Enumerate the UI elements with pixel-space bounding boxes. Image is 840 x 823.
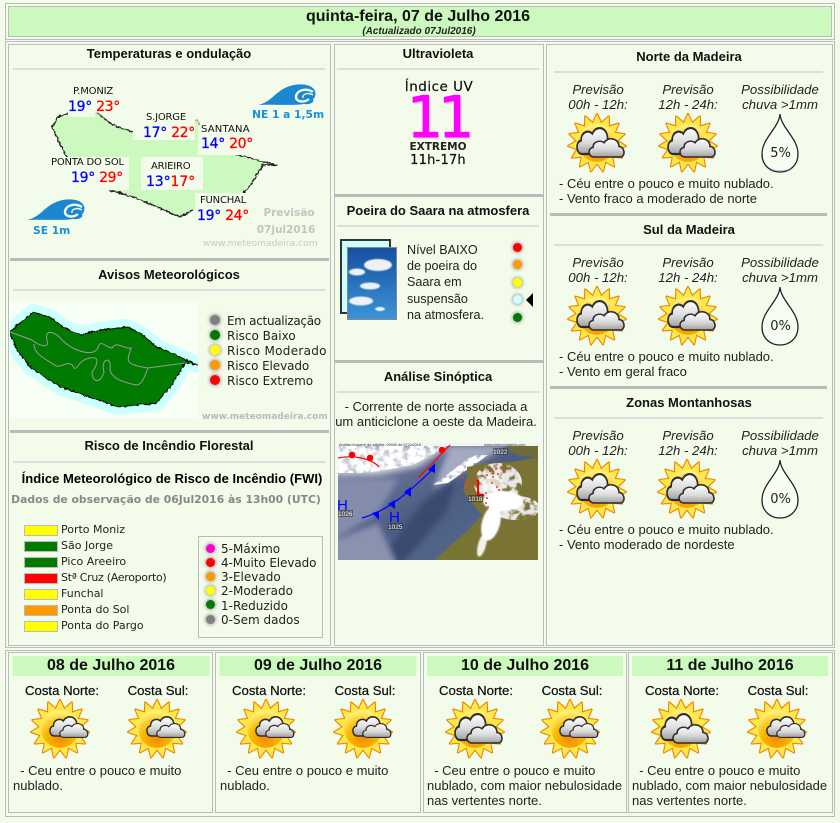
icon: sun cloud 12h <box>657 458 717 518</box>
col1 label <box>568 255 628 285</box>
dot extremo <box>210 375 220 385</box>
UV value: 11 <box>407 85 469 151</box>
col1 label <box>568 428 628 458</box>
heading: poeira: Poeira do Saara na atmosfera <box>347 203 529 218</box>
temp: Santana: 14° 20° <box>201 136 253 152</box>
icon: sun cloud 00h <box>567 458 627 518</box>
icon norte <box>652 700 712 760</box>
panel: right column <box>546 44 833 646</box>
temp: Funchal: 19° 24° <box>197 208 249 224</box>
icon sul <box>334 700 394 760</box>
forecast text <box>559 349 774 379</box>
col1 label <box>568 82 628 112</box>
arrow marker <box>526 293 533 307</box>
label: Arieiro: ARIEIRO <box>151 161 190 172</box>
label: Ponta do Sol: PONTA DO SOL <box>51 157 124 168</box>
label norte: Costa Norte: <box>439 683 513 698</box>
card: 08 Julho <box>8 652 213 813</box>
chart: satellite synoptic map <box>338 443 538 560</box>
panel: Zonas Montanhosas <box>554 395 823 552</box>
label norte: Costa Norte: <box>645 683 719 698</box>
text 0: 0-Sem dados <box>221 613 300 627</box>
forecast text: - Céu entre o pouco e muito nublado. <box>559 349 774 364</box>
map: Madeira temperatures <box>50 112 278 218</box>
text 3: 3-Elevado <box>221 570 281 584</box>
icon: drop 0% <box>761 460 799 519</box>
label sul: Costa Sul: <box>128 683 188 698</box>
name Sao Jorge: São Jorge <box>61 539 113 552</box>
name Porto Moniz: Porto Moniz <box>61 523 125 536</box>
dot 4 <box>206 558 215 567</box>
date band: 09 de Julho 2016 <box>254 657 382 674</box>
observation date: Dados de observação de 06Jul2016 às 13h00 (UTC) <box>11 493 321 506</box>
update note: (Actualizado 07Jul2016) <box>362 26 476 37</box>
temp: P.Moniz: 19° 23° <box>68 99 120 115</box>
text elevado: Risco Elevado <box>227 359 309 373</box>
text 2: 2-Moderado <box>221 584 293 598</box>
heading Norte: Norte da Madeira <box>636 49 742 64</box>
text: - Ceu entre o pouco e muito nublado, com maior nebulosidade nas vertentes norte. <box>632 763 827 808</box>
icon: drop 0% <box>761 287 799 346</box>
col3 label: chuva >1mm <box>742 97 818 112</box>
name Funchal: Funchal <box>61 587 104 600</box>
label sul: Costa Sul: <box>748 683 808 698</box>
swatch Sao Jorge <box>24 541 58 552</box>
header banner <box>5 3 835 40</box>
name Sta Cruz: Stª Cruz (Aeroporto) <box>61 571 166 584</box>
label: S.Jorge: S.JORGE <box>146 112 186 123</box>
forecast text: - Céu entre o pouco e muito nublado. <box>559 176 774 191</box>
icon: sun cloud 00h <box>567 286 627 346</box>
chart: satellite synoptic map: Análise imagem de satélite: 00h00 de 07Jul2016 <box>339 443 421 447</box>
analysis text <box>335 399 537 429</box>
UV level: EXTREMO <box>409 141 467 153</box>
col3 label <box>741 428 819 458</box>
label sul: Costa Sul: <box>542 683 602 698</box>
col1 label: 00h - 12h: <box>568 443 628 458</box>
swatch Sta Cruz <box>24 573 58 584</box>
date band: 11 de Julho 2016 <box>666 657 794 674</box>
col1 label: 00h - 12h: <box>568 270 628 285</box>
dot 3 <box>206 572 215 581</box>
heading: incendio: Risco de Incêndio Florestal <box>84 438 254 453</box>
col1 label: 00h - 12h: <box>568 97 628 112</box>
label sul: Costa Sul: <box>335 683 395 698</box>
credit avisos: www.meteomadeira.com <box>202 412 328 422</box>
icon sul <box>128 700 188 760</box>
map: avisos <box>10 301 198 418</box>
dot 5 <box>206 544 215 553</box>
swatch Pico Areeiro <box>24 557 58 568</box>
credit: www.meteomadeira.com <box>203 238 318 249</box>
outer frame main <box>5 41 835 648</box>
text: - Ceu entre o pouco e muito nublado. <box>220 763 388 793</box>
col3 label: chuva >1mm <box>742 270 818 285</box>
heading: analise: Análise Sinóptica <box>384 369 492 384</box>
col2 label <box>658 255 718 285</box>
header fill <box>8 6 832 37</box>
swatch Ponta do Pargo <box>24 621 58 632</box>
chart: satellite synoptic map: 1026 <box>338 511 353 518</box>
col3 label: Possibilidade <box>741 428 819 443</box>
heading: ultravioleta: Ultravioleta <box>403 46 473 61</box>
panel: middle column <box>334 44 544 646</box>
legend: avisos <box>207 312 327 388</box>
swatch Ponta do Sol <box>24 605 58 616</box>
dust text: de poeira do <box>407 259 477 273</box>
panel: Sul <box>554 222 823 379</box>
wave label NE: NE 1 a 1,5m <box>252 108 324 121</box>
name Ponta do Pargo: Ponta do Pargo <box>61 619 144 632</box>
card: 09 Julho <box>215 652 421 813</box>
forecast text: - Vento em geral fraco <box>559 364 687 379</box>
temp: S.Jorge: 17° 22° <box>143 125 195 141</box>
forecast text: - Vento fraco a moderado de norte <box>559 191 757 206</box>
chart: satellite synoptic map: 1025 <box>388 524 403 531</box>
date band <box>12 656 210 676</box>
col3 label: Possibilidade <box>741 82 819 97</box>
col2 label <box>658 428 718 458</box>
temp: Arieiro: 13°17° <box>146 174 195 190</box>
dust yellow <box>513 278 522 287</box>
dot moderado <box>210 345 220 355</box>
UV label: Índice UV <box>405 79 473 95</box>
chart: satellite synoptic map: www.meteomadeira.com <box>484 443 526 447</box>
forecast text <box>559 522 774 552</box>
icon norte <box>30 698 90 758</box>
forecast date: 07jul2016 <box>257 224 315 236</box>
icon: sun cloud 00h <box>567 112 627 172</box>
label norte: Costa Norte: <box>25 683 99 698</box>
analysis text: um anticiclone a oeste da Madeira. <box>335 414 537 429</box>
text: - Ceu entre o pouco e muito nublado, com maior nebulosidade nas vertentes norte. <box>427 763 622 808</box>
col1 label: Previsão <box>572 255 624 270</box>
title: quinta-feira, 07 de Julho 2016 <box>306 8 530 25</box>
text: - Ceu entre o pouco e muito nublado. <box>13 763 181 793</box>
col1 label: Previsão <box>572 428 624 443</box>
dot 0 <box>206 615 215 624</box>
col2 label <box>658 82 718 112</box>
dust text: Nível BAIXO <box>407 243 478 257</box>
icon norte <box>237 700 297 760</box>
col2 label: Previsão <box>662 428 714 443</box>
icon norte <box>446 700 506 760</box>
card: 11 Julho <box>628 652 833 813</box>
heading Zonas: Zonas Montanhosas <box>626 395 752 410</box>
col3 label <box>741 255 819 285</box>
text moderado: Risco Moderado <box>227 344 327 358</box>
analysis text: - Corrente de norte associada a <box>345 399 527 414</box>
icon: drop 0%: 0% <box>770 492 791 507</box>
text em actualizacao: Em actualização <box>227 314 321 328</box>
label: Funchal: FUNCHAL <box>200 195 246 206</box>
icon: sun cloud 12h <box>658 112 718 172</box>
text baixo: Risco Baixo <box>227 329 296 343</box>
text 5: 5-Máximo <box>221 542 280 556</box>
dust text: na atmosfera. <box>407 308 484 322</box>
icon sul <box>541 700 601 760</box>
chart: satellite synoptic map: 1018 <box>468 496 483 503</box>
swatch Porto Moniz <box>24 525 58 536</box>
icon: wave NE <box>258 84 316 105</box>
dot em actualizacao <box>210 315 220 325</box>
image: sky <box>340 239 397 320</box>
col2 label: 12h - 24h: <box>658 443 718 458</box>
chart: satellite synoptic map: H <box>389 509 400 526</box>
FWI title: Índice Meteorológico de Risco de Incêndio (FWI) <box>22 471 322 486</box>
dot elevado <box>210 360 220 370</box>
icon sul <box>748 700 808 760</box>
date band <box>220 656 416 676</box>
chart: satellite synoptic map: 1022 <box>493 449 508 456</box>
swatch Funchal <box>24 589 58 600</box>
dust text: suspensão <box>407 292 468 306</box>
icon: drop 0%: 0% <box>770 319 791 334</box>
dust text: Saara em <box>407 275 462 289</box>
dust orange <box>513 260 522 269</box>
dot baixo <box>210 330 220 340</box>
label: P.Moniz: P.MONIZ <box>73 86 113 97</box>
icon: drop 5%: 5% <box>770 146 791 161</box>
text extremo: Risco Extremo <box>227 374 313 388</box>
date band <box>632 656 828 676</box>
dot 2 <box>206 586 215 595</box>
col3 label <box>741 82 819 112</box>
col2 label: Previsão <box>662 255 714 270</box>
forecast stamp: Previsão <box>264 207 314 219</box>
chart: satellite synoptic map: H <box>337 497 348 514</box>
temp: Ponta do Sol: 19° 29° <box>71 170 123 186</box>
text 1: 1-Reduzido <box>221 599 288 613</box>
col3 label: Possibilidade <box>741 255 819 270</box>
name Ponta do Sol: Ponta do Sol <box>61 603 129 616</box>
dust text <box>407 243 484 322</box>
icon: wave SE <box>27 199 84 220</box>
wave label SE: SE 1m <box>33 224 70 237</box>
col2 label: Previsão <box>662 82 714 97</box>
panel: Norte <box>554 49 823 206</box>
forecast text: - Vento moderado de nordeste <box>559 537 735 552</box>
dust light blue <box>513 295 522 304</box>
dust scale <box>510 240 533 325</box>
text 4: 4-Muito Elevado <box>221 556 316 570</box>
heading: avisos: Avisos Meteorológicos <box>98 267 240 282</box>
heading Sul: Sul da Madeira <box>643 222 735 237</box>
date band: 08 de Julho 2016 <box>47 657 175 674</box>
card: 10 Julho <box>423 652 627 813</box>
name Pico Areeiro: Pico Areeiro <box>61 555 126 568</box>
col3 label: chuva >1mm <box>742 443 818 458</box>
label norte: Costa Norte: <box>232 683 306 698</box>
heading: temperaturas: Temperaturas e ondulação <box>87 46 251 61</box>
panel: left column <box>8 44 331 646</box>
col2 label: 12h - 24h: <box>658 97 718 112</box>
date band: 10 de Julho 2016 <box>461 657 589 674</box>
dust red <box>513 243 522 252</box>
UV hours: 11h-17h <box>410 153 466 168</box>
date band <box>427 656 623 676</box>
dust green <box>513 313 522 322</box>
label: Santana: SANTANA <box>201 124 250 135</box>
col2 label: 12h - 24h: <box>658 270 718 285</box>
forecast text: - Céu entre o pouco e muito nublado. <box>559 522 774 537</box>
dot 1 <box>206 600 215 609</box>
outer frame forecast row <box>5 650 835 817</box>
icon: sun cloud 12h <box>658 286 718 346</box>
legend: FWI <box>198 536 323 638</box>
col1 label: Previsão <box>572 82 624 97</box>
forecast text <box>559 176 774 206</box>
icon: drop 5% <box>761 114 799 173</box>
station list <box>24 523 166 632</box>
